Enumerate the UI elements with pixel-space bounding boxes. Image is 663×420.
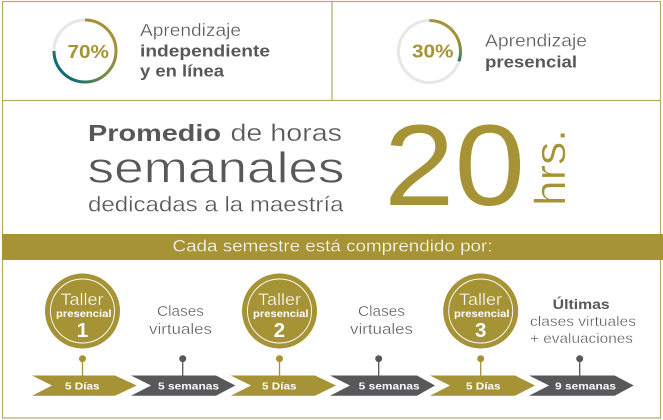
text: clases virtuales 1: virtuales [149,321,212,338]
badge: taller 3: 3 [475,319,486,342]
panel: 70% independent learning [54,20,270,82]
text: final classes [530,295,636,346]
badge: taller 1: Taller [60,290,104,309]
text: clases virtuales 2: Clases [358,303,405,320]
panel: 30% in-person learning [398,20,587,82]
arrow: 9 semanas: 9 semanas [555,380,616,392]
donut: 70% [54,20,116,82]
pins [79,355,583,376]
timeline arrows [32,376,634,396]
arrow: 5 días 3: 5 Días [466,380,501,392]
text: clases virtuales 1: Clases [157,303,204,320]
text: independent learning: y en línea [140,62,225,80]
big number: 20 hrs [384,102,575,230]
big number: 20 hrs: hrs. [526,129,575,206]
text: in-person learning: Aprendizaje [485,30,587,50]
text: clases virtuales 1 [149,303,212,338]
banner: each semester [2,234,663,260]
badge: taller 2: presencial [253,308,309,320]
arrow: 5 días 1: 5 Días [65,380,100,392]
text: in-person learning: presencial [485,52,577,72]
donut: 70%: 70% [68,41,109,62]
big number: 20 hrs: 20 [384,102,525,230]
text: in-person learning [485,30,587,72]
text: clases virtuales 2 [350,303,413,338]
badge: taller 2: Taller [258,290,301,309]
badge: taller 1: 1 [77,319,88,342]
arrow: 5 semanas 1: 5 semanas [158,380,219,392]
banner: each semester: Cada semestre está comprendido por: [172,238,492,256]
text: independent learning: Aprendizaje [140,20,241,40]
badge: taller 2: 2 [274,319,285,342]
arrow: 5 semanas 1 [131,376,235,396]
donut: 30%: 30% [412,40,454,62]
text: independent learning: independiente [140,42,270,60]
arrow: 5 días 1 [32,376,137,396]
heading: weekly hours: dedicadas a la maestría [88,194,344,217]
badge: taller 3: Taller [459,290,502,309]
arrow: 5 días 3 [430,376,535,396]
arrow: 9 semanas [529,376,634,396]
heading: weekly hours: Promedio [88,120,221,146]
text: final classes: clases virtuales [530,313,636,329]
donut: 30% [398,20,460,82]
badge: taller 2 [242,274,317,348]
arrow: 5 días 2 [231,376,336,396]
text: final classes: + evaluaciones [530,330,633,346]
heading: weekly hours: semanales [88,144,344,193]
arrow: 5 días 2: 5 Días [262,380,297,392]
arrow: 5 semanas 2: 5 semanas [359,380,420,392]
badge: taller 1 [45,274,120,348]
heading: weekly hours: de horas [230,120,342,147]
text: clases virtuales 2: virtuales [350,321,413,338]
text: independent learning [140,20,270,80]
arrow: 5 semanas 2 [330,376,435,396]
badge: taller 3: presencial [454,308,510,320]
text: final classes: Últimas [553,295,610,312]
heading: weekly hours [88,120,344,217]
badge: taller 3 [443,274,518,348]
badge: taller 1: presencial [56,308,112,320]
